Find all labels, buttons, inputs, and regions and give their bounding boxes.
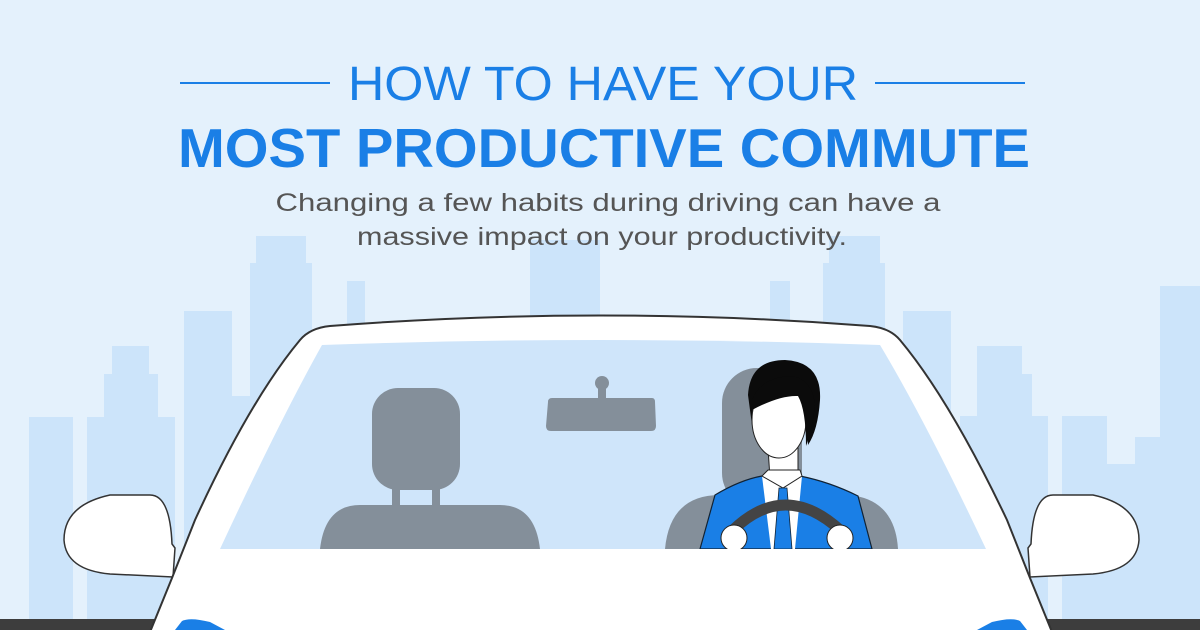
windshield (220, 340, 986, 549)
title: MOST PRODUCTIVE COMMUTE (178, 117, 1030, 179)
dashboard (196, 549, 1010, 630)
passenger seat (320, 388, 540, 549)
car body (150, 316, 1052, 630)
title (178, 58, 1030, 179)
mirror: right (1028, 495, 1139, 577)
driver (665, 360, 898, 551)
headlights (175, 619, 225, 630)
subtitle (276, 189, 941, 251)
mirror: left (64, 495, 175, 577)
subtitle: Changing a few habits during driving can have a (276, 189, 941, 217)
city skyline (29, 236, 1200, 630)
steering wheel (733, 505, 840, 530)
subtitle: massive impact on your productivity. (357, 223, 847, 251)
title: HOW TO HAVE YOUR (348, 58, 858, 111)
rearview mirror (546, 376, 656, 431)
road (0, 619, 1200, 630)
